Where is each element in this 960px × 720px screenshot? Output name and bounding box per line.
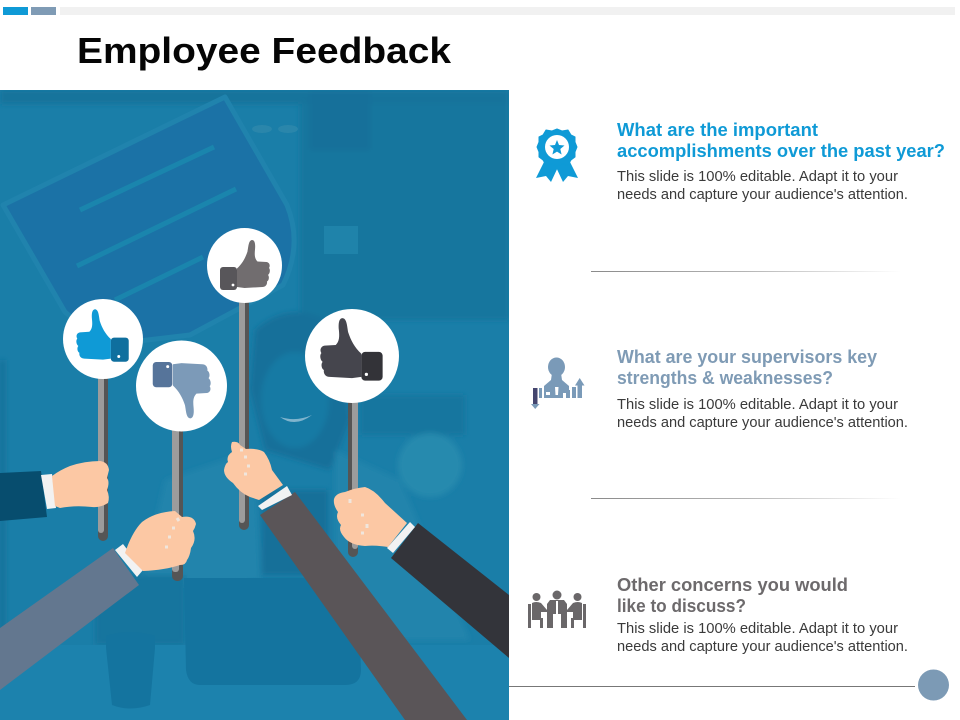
text block: supervisors	[617, 347, 908, 431]
text block: other concerns: needs and capture your audience's attention.	[617, 639, 908, 655]
text block: other concerns: This slide is 100% editable. Adapt it to your	[617, 621, 898, 637]
icon: meeting people	[528, 590, 586, 628]
text block: accomplishments	[617, 120, 945, 203]
sign: blue thumbs up	[63, 299, 143, 541]
arm: grey sleeve hand	[224, 442, 467, 720]
icon: supervisor with bars	[531, 358, 584, 409]
text block: other concerns	[617, 575, 908, 655]
arm: teal sleeve hand	[0, 461, 109, 521]
text block: supervisors: This slide is 100% editable. Adapt it to your	[617, 397, 898, 413]
panel: photo background with blue overlay	[0, 90, 509, 720]
text block: accomplishments: needs and capture your audience's attention.	[617, 187, 908, 203]
text block: other concerns: Other concerns you would	[617, 575, 848, 595]
arm: charcoal sleeve hand	[334, 487, 509, 658]
sign: charcoal thumbs up	[305, 309, 399, 557]
text block: accomplishments: This slide is 100% editable. Adapt it to your	[617, 169, 898, 185]
text block: supervisors: What are your supervisors key	[617, 347, 877, 367]
top header bars	[3, 7, 955, 15]
text block: supervisors: needs and capture your audience's attention.	[617, 415, 908, 431]
footer circle	[918, 670, 949, 700]
text block: other concerns: like to discuss?	[617, 596, 746, 616]
title: Employee Feedback	[77, 30, 452, 71]
sign: grey thumbs down	[136, 340, 227, 581]
text block: supervisors: strengths & weaknesses?	[617, 368, 833, 388]
sign: dark grey thumbs up	[207, 228, 282, 530]
arm: slate sleeve hand	[0, 511, 196, 690]
text block: accomplishments: What are the important	[617, 120, 818, 140]
text block: accomplishments: accomplishments over the past year?	[617, 141, 945, 161]
icon: award ribbon	[536, 129, 578, 182]
